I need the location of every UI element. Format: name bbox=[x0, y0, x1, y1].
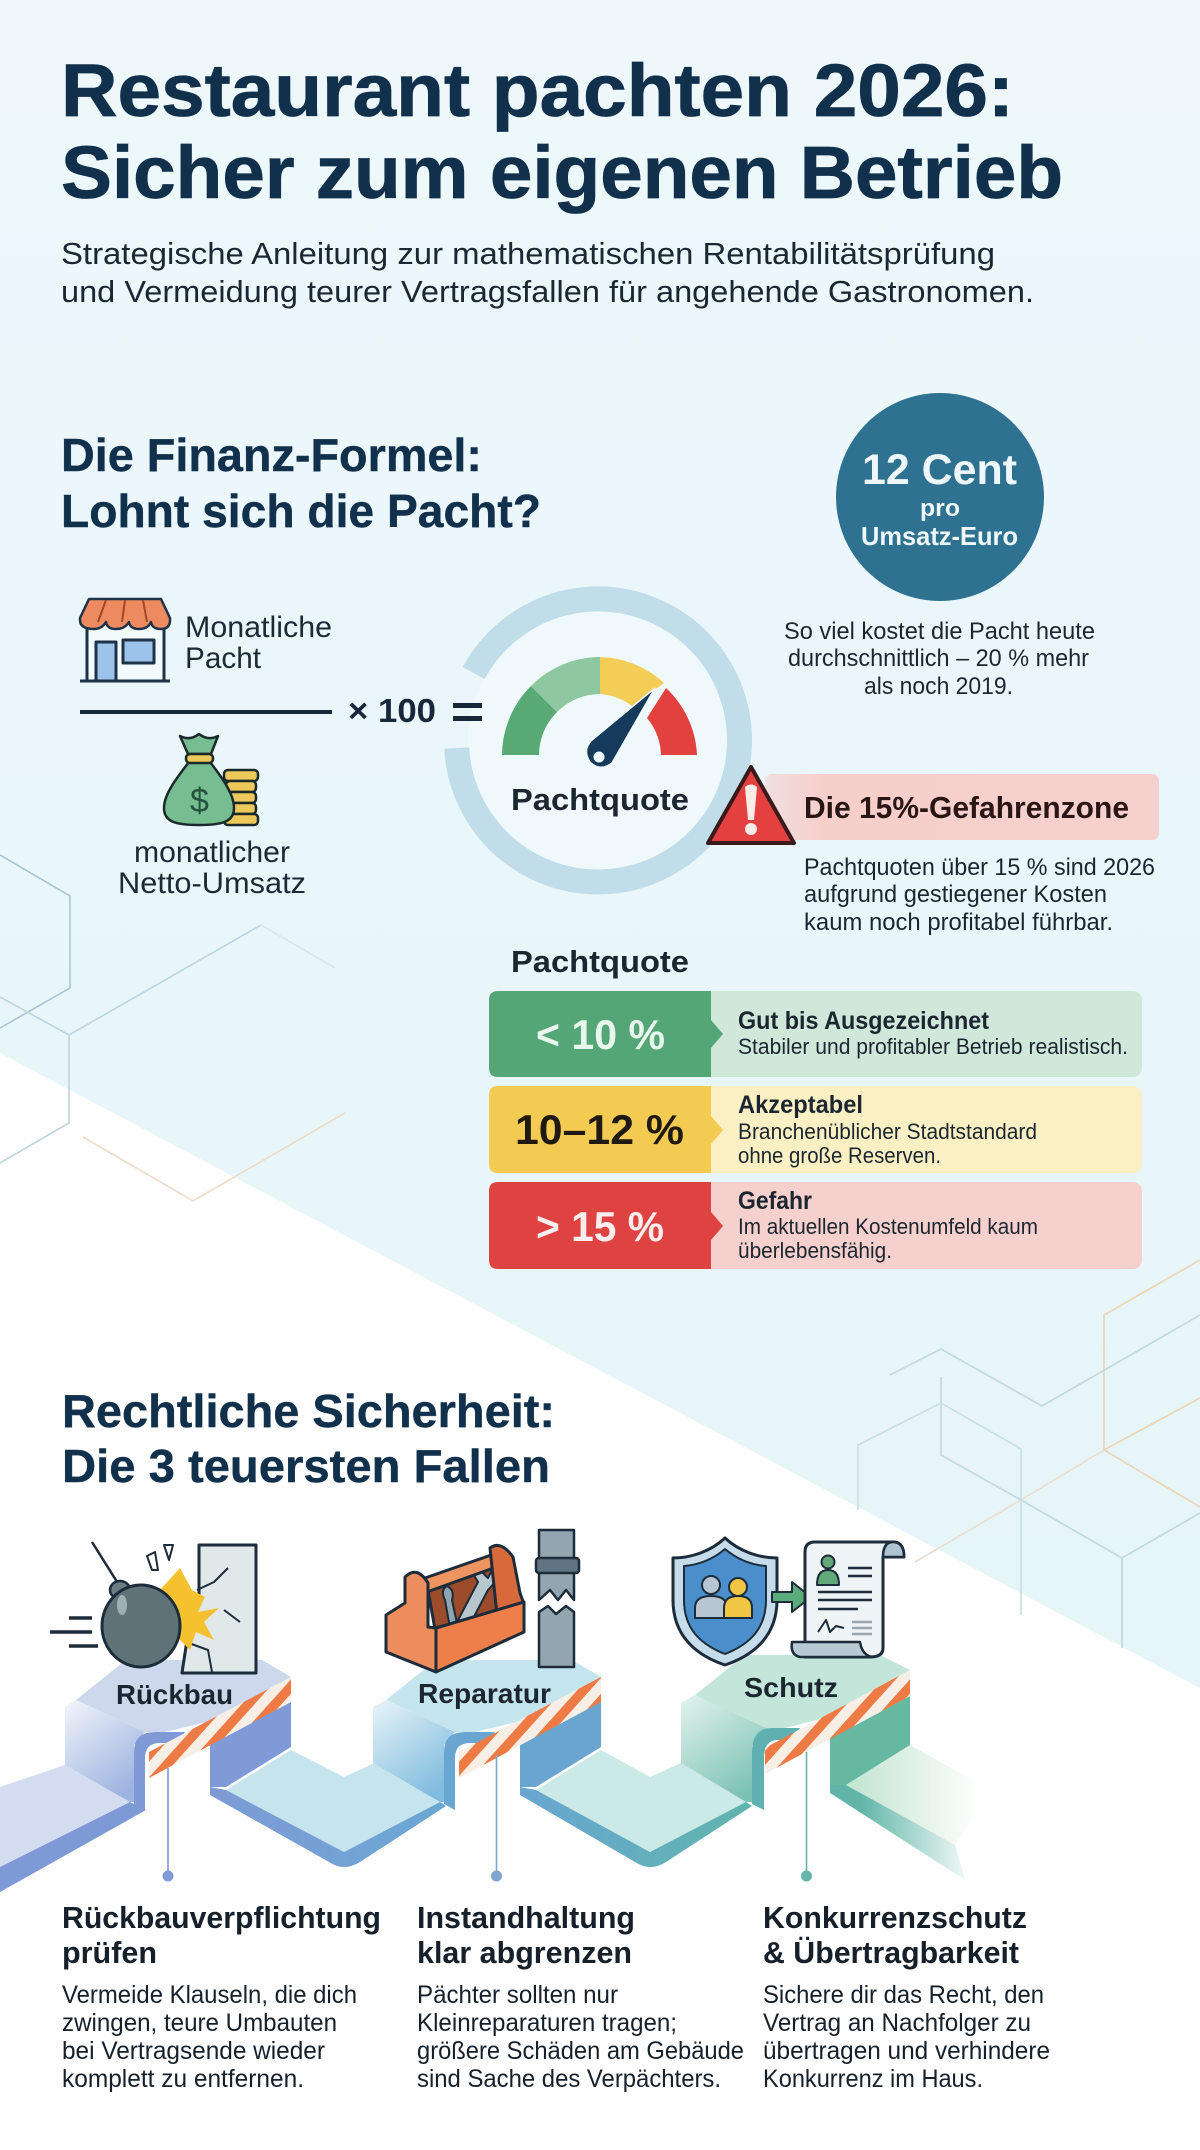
ribbon path bbox=[0, 1655, 990, 1892]
stat circle: 12 cent bbox=[836, 393, 1044, 601]
danger zone text: kaum noch profitabel führbar. bbox=[804, 909, 1113, 936]
label: monthly rent: Monatliche bbox=[185, 611, 332, 644]
icon: money bag bbox=[164, 734, 258, 825]
icon: contract document bbox=[792, 1542, 904, 1657]
ribbon section: Reparatur bbox=[373, 1660, 752, 1867]
label: monthly rent bbox=[185, 611, 332, 675]
subtitle: und Vermeidung teurer Vertragsfallen für angehende Gastronomen. bbox=[61, 274, 1034, 309]
legend row: over 15 percent: > 15 % bbox=[536, 1203, 664, 1250]
subtitle: Strategische Anleitung zur mathematischen Rentabilitätsprüfung bbox=[61, 236, 995, 271]
stat caption: So viel kostet die Pacht heute bbox=[784, 618, 1095, 645]
danger zone text bbox=[804, 854, 1155, 936]
column: Konkurrenzschutz: Vertrag an Nachfolger zu bbox=[763, 2009, 1031, 2037]
title: Sicher zum eigenen Betrieb bbox=[61, 131, 1063, 214]
legend row: over 15 percent: überlebensfähig. bbox=[738, 1238, 892, 1263]
dollar sign: $ bbox=[190, 782, 209, 820]
label: monthly net revenue: Netto-Umsatz bbox=[118, 867, 306, 900]
legend row: under 10 percent: Stabiler und profitabler Betrieb realistisch. bbox=[738, 1034, 1128, 1059]
legend row: under 10 percent: < 10 % bbox=[536, 1011, 665, 1058]
icon: broken pipe bbox=[536, 1530, 579, 1667]
section heading: finance formula bbox=[61, 429, 541, 537]
label: monthly rent: Pacht bbox=[185, 642, 262, 675]
label: Rückbau: Rückbau bbox=[116, 1679, 233, 1710]
column: Konkurrenzschutz bbox=[763, 1900, 1050, 2093]
section heading: finance formula: Lohnt sich die Pacht? bbox=[61, 485, 541, 537]
legend row: 10 to 12 percent: ohne große Reserven. bbox=[738, 1143, 941, 1168]
subtitle bbox=[61, 236, 1034, 309]
icon: wrecking ball bbox=[50, 1542, 256, 1673]
legend row: over 15 percent: Gefahr bbox=[738, 1187, 812, 1215]
icon: shield with people bbox=[673, 1538, 811, 1665]
column: Konkurrenzschutz: Sichere dir das Recht, den bbox=[763, 1981, 1044, 2009]
stat circle: 12 cent: Umsatz-Euro bbox=[861, 521, 1018, 551]
ribbon tail right bbox=[830, 1745, 964, 1880]
column: Instandhaltung: Kleinreparaturen tragen; bbox=[417, 2009, 677, 2037]
icon: storefront bbox=[80, 599, 170, 681]
column: Konkurrenzschutz: übertragen und verhindere bbox=[763, 2037, 1050, 2065]
icon: toolbox bbox=[386, 1545, 524, 1672]
column: Rückbauverpflichtung: zwingen, teure Umbauten bbox=[62, 2009, 337, 2037]
danger zone text: Pachtquoten über 15 % sind 2026 bbox=[804, 854, 1155, 881]
column: Rückbauverpflichtung: prüfen bbox=[62, 1935, 157, 1970]
column: Rückbauverpflichtung: komplett zu entfernen. bbox=[62, 2065, 304, 2093]
legend row: 10 to 12 percent: Akzeptabel bbox=[738, 1091, 863, 1119]
legend row: 10 to 12 percent: Branchenüblicher Stadtstandard bbox=[738, 1119, 1037, 1144]
section heading: legal traps: Die 3 teuersten Fallen bbox=[62, 1440, 550, 1492]
gauge label: Pachtquote bbox=[511, 782, 689, 817]
gauge bbox=[502, 657, 697, 767]
background hexagon lines, right bbox=[858, 1260, 1200, 1648]
column: Konkurrenzschutz: Konkurrenz im Haus. bbox=[763, 2065, 983, 2093]
background hexagon lines, left bbox=[0, 855, 345, 1201]
danger zone banner: Die 15%-Gefahrenzone bbox=[804, 790, 1129, 825]
legend heading: Pachtquote bbox=[511, 944, 689, 979]
equals sign bbox=[453, 703, 482, 721]
legend row: 10 to 12 percent bbox=[489, 1086, 1142, 1173]
stat caption: durchschnittlich – 20 % mehr bbox=[788, 645, 1089, 672]
stat circle: 12 cent: 12 Cent bbox=[862, 446, 1017, 494]
section heading: legal traps: Rechtliche Sicherheit: bbox=[62, 1385, 555, 1437]
stat circle: 12 cent: pro bbox=[920, 495, 960, 522]
column: Instandhaltung: Pächter sollten nur bbox=[417, 1981, 618, 2009]
ribbon tail left bbox=[0, 1765, 146, 1892]
column: Instandhaltung: Instandhaltung bbox=[417, 1900, 635, 1935]
column: Rückbauverpflichtung: Rückbauverpflichtung bbox=[62, 1900, 381, 1935]
column: Instandhaltung: sind Sache des Verpächters. bbox=[417, 2065, 721, 2093]
section heading: legal traps bbox=[62, 1385, 555, 1492]
legend row: under 10 percent bbox=[489, 991, 1142, 1077]
ribbon section: Schutz bbox=[681, 1655, 910, 1810]
column: Rückbauverpflichtung bbox=[62, 1900, 381, 2093]
column: Rückbauverpflichtung: bei Vertragsende wieder bbox=[62, 2037, 325, 2065]
label: Schutz: Schutz bbox=[744, 1672, 838, 1703]
stat caption bbox=[784, 618, 1095, 700]
formula bbox=[80, 599, 482, 900]
column: Konkurrenzschutz: & Übertragbarkeit bbox=[763, 1935, 1019, 1970]
column: Instandhaltung bbox=[417, 1900, 744, 2093]
stat caption: als noch 2019. bbox=[864, 673, 1013, 700]
title bbox=[61, 49, 1063, 214]
pin: Schutz bbox=[801, 1752, 812, 1882]
danger zone text: aufgrund gestiegener Kosten bbox=[804, 881, 1107, 908]
pin: Reparatur bbox=[491, 1755, 502, 1882]
ribbon section: Rückbau bbox=[65, 1660, 446, 1867]
legend row: 10 to 12 percent: 10–12 % bbox=[515, 1106, 684, 1153]
legend row: over 15 percent bbox=[489, 1182, 1142, 1269]
label: Reparatur: Reparatur bbox=[418, 1678, 551, 1709]
icon: warning triangle bbox=[708, 767, 794, 843]
danger zone banner bbox=[708, 767, 1159, 843]
fraction line bbox=[80, 710, 332, 714]
gauge ring bbox=[457, 599, 739, 882]
label: monthly net revenue: monatlicher bbox=[134, 836, 290, 869]
column: Instandhaltung: größere Schäden am Gebäude bbox=[417, 2037, 744, 2065]
legend row: over 15 percent: Im aktuellen Kostenumfeld kaum bbox=[738, 1214, 1038, 1239]
pin: Rückbau bbox=[162, 1768, 174, 1882]
column: Instandhaltung: klar abgrenzen bbox=[417, 1935, 632, 1970]
legend row: under 10 percent: Gut bis Ausgezeichnet bbox=[738, 1007, 990, 1035]
title: Restaurant pachten 2026: bbox=[61, 49, 1014, 132]
label: monthly net revenue bbox=[118, 836, 306, 900]
column: Rückbauverpflichtung: Vermeide Klauseln, die dich bbox=[62, 1981, 357, 2009]
section heading: finance formula: Die Finanz-Formel: bbox=[61, 429, 482, 481]
multiply by 100: × 100 bbox=[348, 692, 436, 729]
column: Konkurrenzschutz: Konkurrenzschutz bbox=[763, 1900, 1027, 1935]
